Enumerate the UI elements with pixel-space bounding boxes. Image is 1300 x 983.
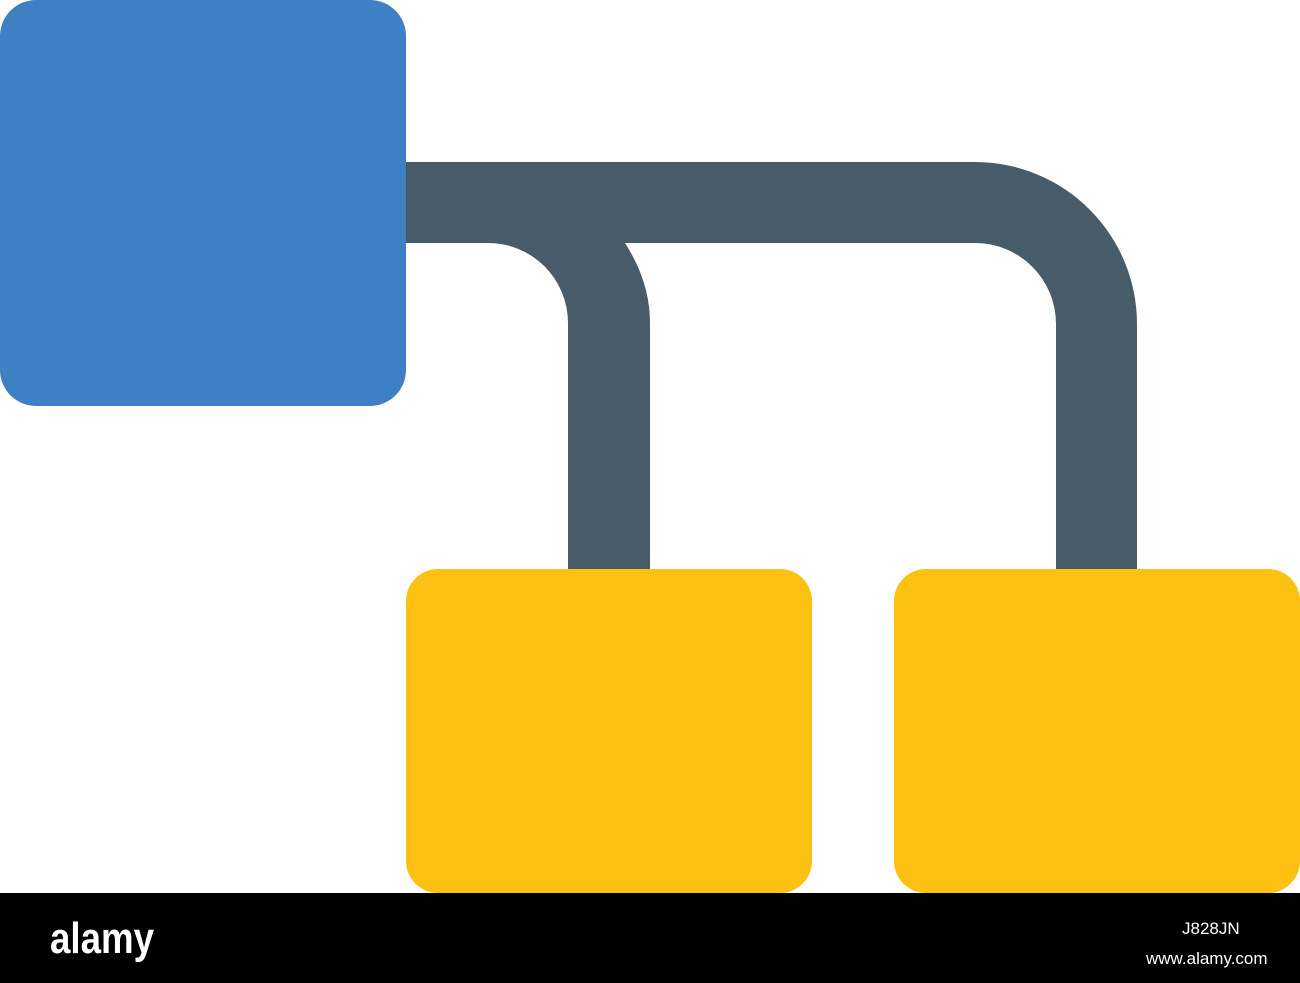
footer id: J828JN <box>1182 919 1240 938</box>
box: child yellow right <box>894 569 1300 893</box>
box: parent blue <box>0 0 406 406</box>
footer bar <box>0 893 1300 983</box>
connector lines <box>400 162 1137 575</box>
box: child yellow left <box>406 569 812 893</box>
footer url: www.alamy.com <box>1145 949 1268 968</box>
footer logo: alamy <box>50 914 154 963</box>
